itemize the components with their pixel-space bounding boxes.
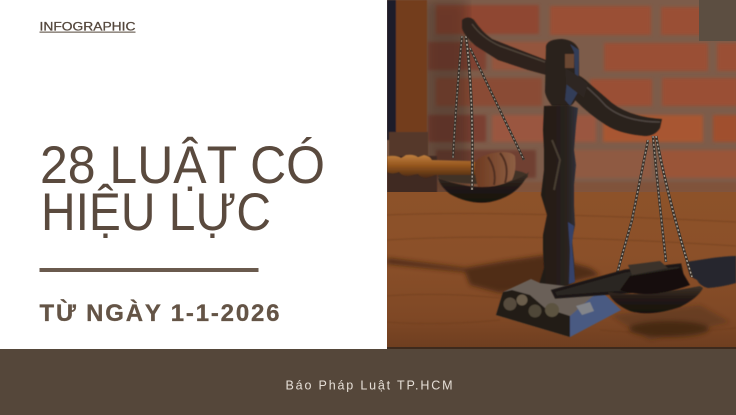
scale base <box>496 279 621 337</box>
gavel head <box>475 152 516 187</box>
right pan chains (rear) <box>616 136 668 272</box>
kicker label: INFOGRAPHIC <box>40 22 136 34</box>
left pan back <box>438 168 528 184</box>
divider rule <box>40 268 258 272</box>
scale beam <box>462 18 662 136</box>
title: 28 LUẬT CÓ <box>40 136 325 195</box>
left pan front chain <box>466 36 472 190</box>
wood grain <box>388 213 736 246</box>
title: HIỆU LỰC <box>41 183 271 242</box>
footer source text: Báo Pháp Luật TP.HCM <box>286 378 452 392</box>
scale column <box>538 105 578 292</box>
gavel on the left pan <box>387 152 529 203</box>
top-right corner square <box>699 0 736 41</box>
table shadows <box>387 255 730 340</box>
beam pivot bracket <box>545 39 579 106</box>
left white panel <box>0 0 387 349</box>
gavel handle <box>387 155 478 178</box>
title <box>40 136 325 242</box>
left pan chains (rear) <box>453 36 524 160</box>
footer band <box>0 349 736 415</box>
table <box>387 192 736 349</box>
wall shadow <box>425 0 467 195</box>
left pan bowl <box>438 172 529 203</box>
dark gavel on the right pan <box>553 256 736 313</box>
wooden post <box>387 0 437 194</box>
right pan front chain <box>656 136 692 277</box>
subtitle: TỪ NGÀY 1-1-2026 <box>40 299 280 327</box>
photo: iron scales and gavel on a wooden table <box>387 0 736 349</box>
brick wall <box>387 0 736 195</box>
